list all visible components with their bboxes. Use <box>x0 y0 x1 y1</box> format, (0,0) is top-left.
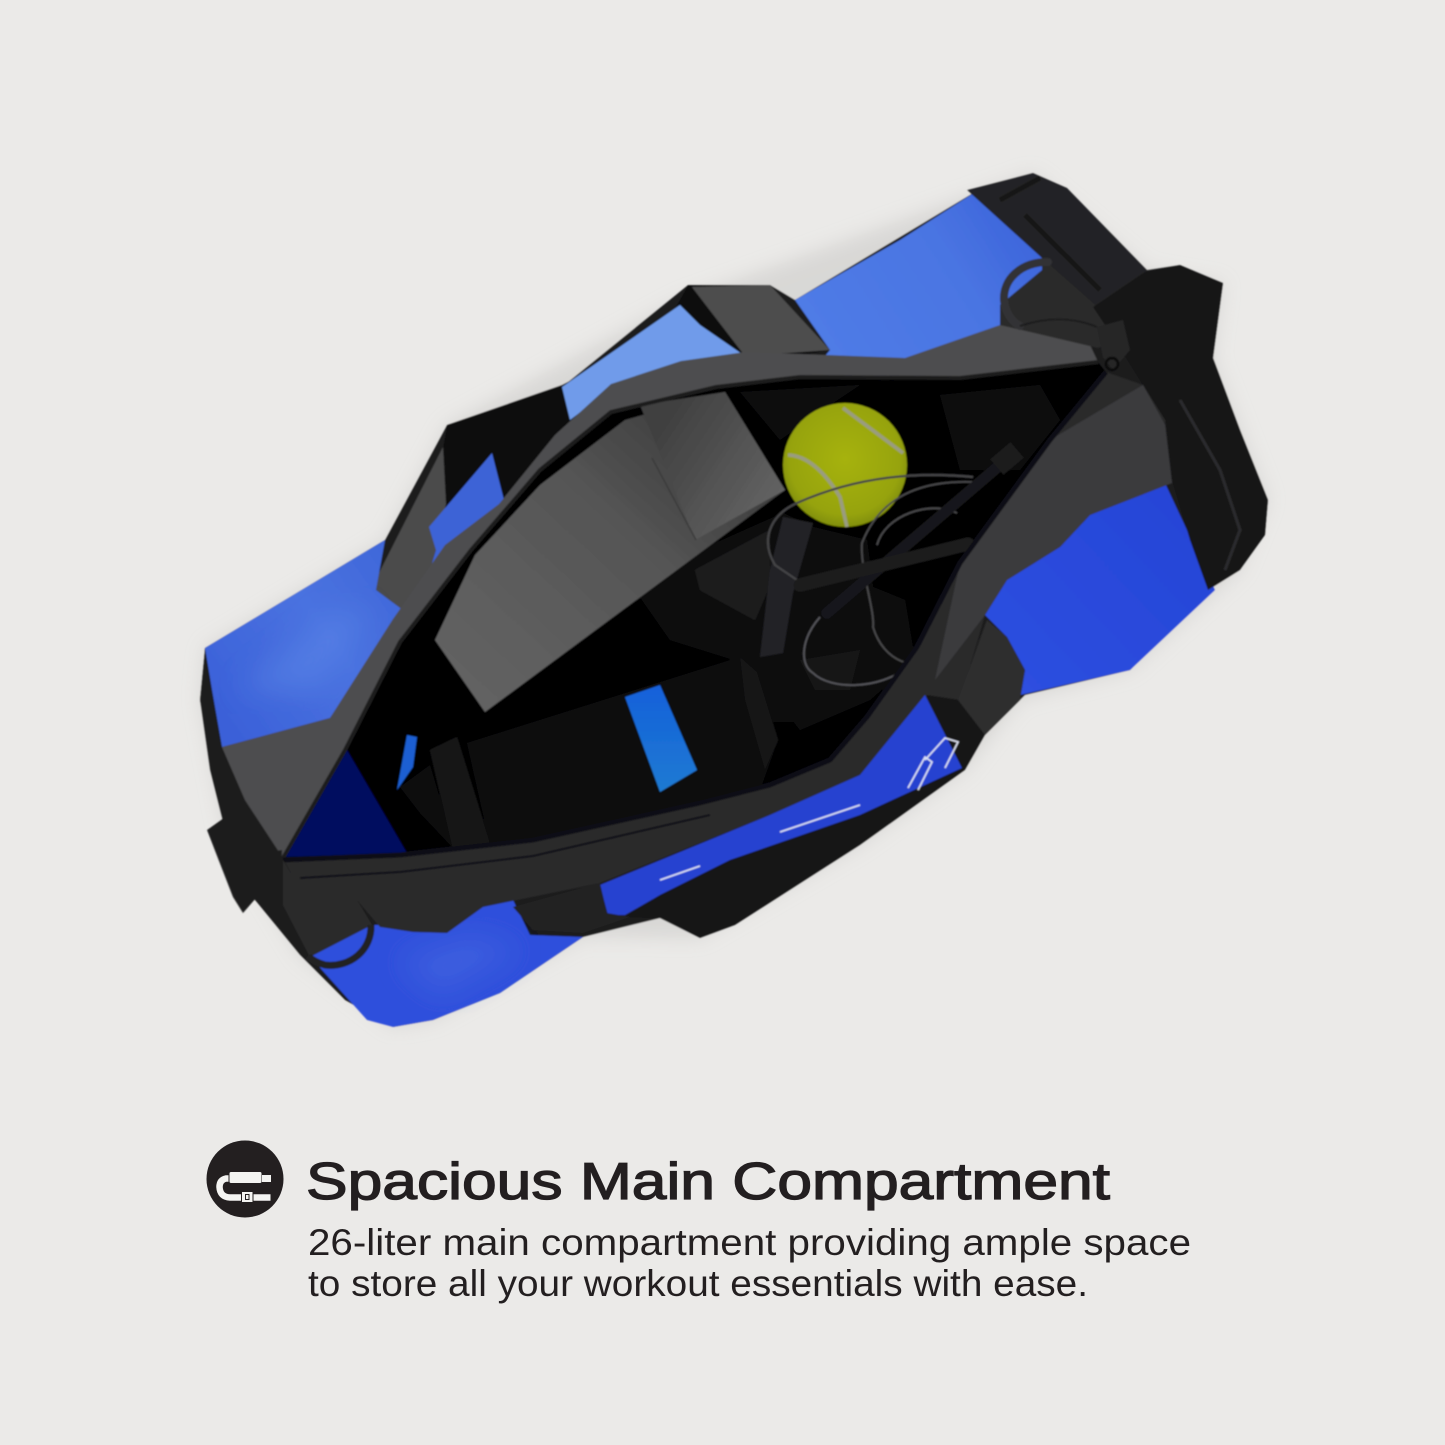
gusset: lower left <box>283 860 372 957</box>
main compartment: interior <box>283 362 1106 858</box>
body text: 26-liter main compartment providing ample space <box>308 1222 1191 1263</box>
zipper pull: right <box>1097 320 1130 370</box>
side strap: right <box>1093 265 1223 385</box>
bag silhouette base <box>200 173 1268 1027</box>
pull loop: top <box>1004 262 1097 327</box>
blue panel: right side <box>985 483 1215 695</box>
pull loop: bottom <box>308 925 371 965</box>
item: tennis ball <box>783 403 907 527</box>
side strap: left <box>207 817 263 913</box>
item: gloves <box>640 513 915 730</box>
product photo: duffel bag <box>200 173 1268 1027</box>
blue print panel <box>600 695 962 915</box>
grey panel: upper rim <box>222 258 1115 858</box>
feature caption <box>206 1140 1191 1304</box>
grey panel: right side <box>283 372 1172 933</box>
end cap: lower right <box>1143 358 1268 590</box>
body text: to store all your workout essentials with ease. <box>308 1263 1088 1304</box>
bag body: lower blue panel <box>310 900 583 1027</box>
end cap: left edge <box>200 648 393 1027</box>
item: shaker bottle <box>397 657 778 850</box>
body text <box>308 1222 1191 1304</box>
icon: compartment belt badge <box>206 1140 284 1218</box>
end cap: top right <box>967 173 1147 310</box>
item: jump rope <box>768 450 1017 685</box>
heading: Spacious Main Compartment <box>306 1153 1111 1211</box>
near carry handle <box>513 620 1025 938</box>
bag body: upper blue panels <box>205 186 1042 747</box>
far carry handle <box>376 285 830 619</box>
zipper pull: left <box>260 850 282 897</box>
printed logo on bag <box>660 738 958 880</box>
item: grey towel <box>435 392 785 712</box>
